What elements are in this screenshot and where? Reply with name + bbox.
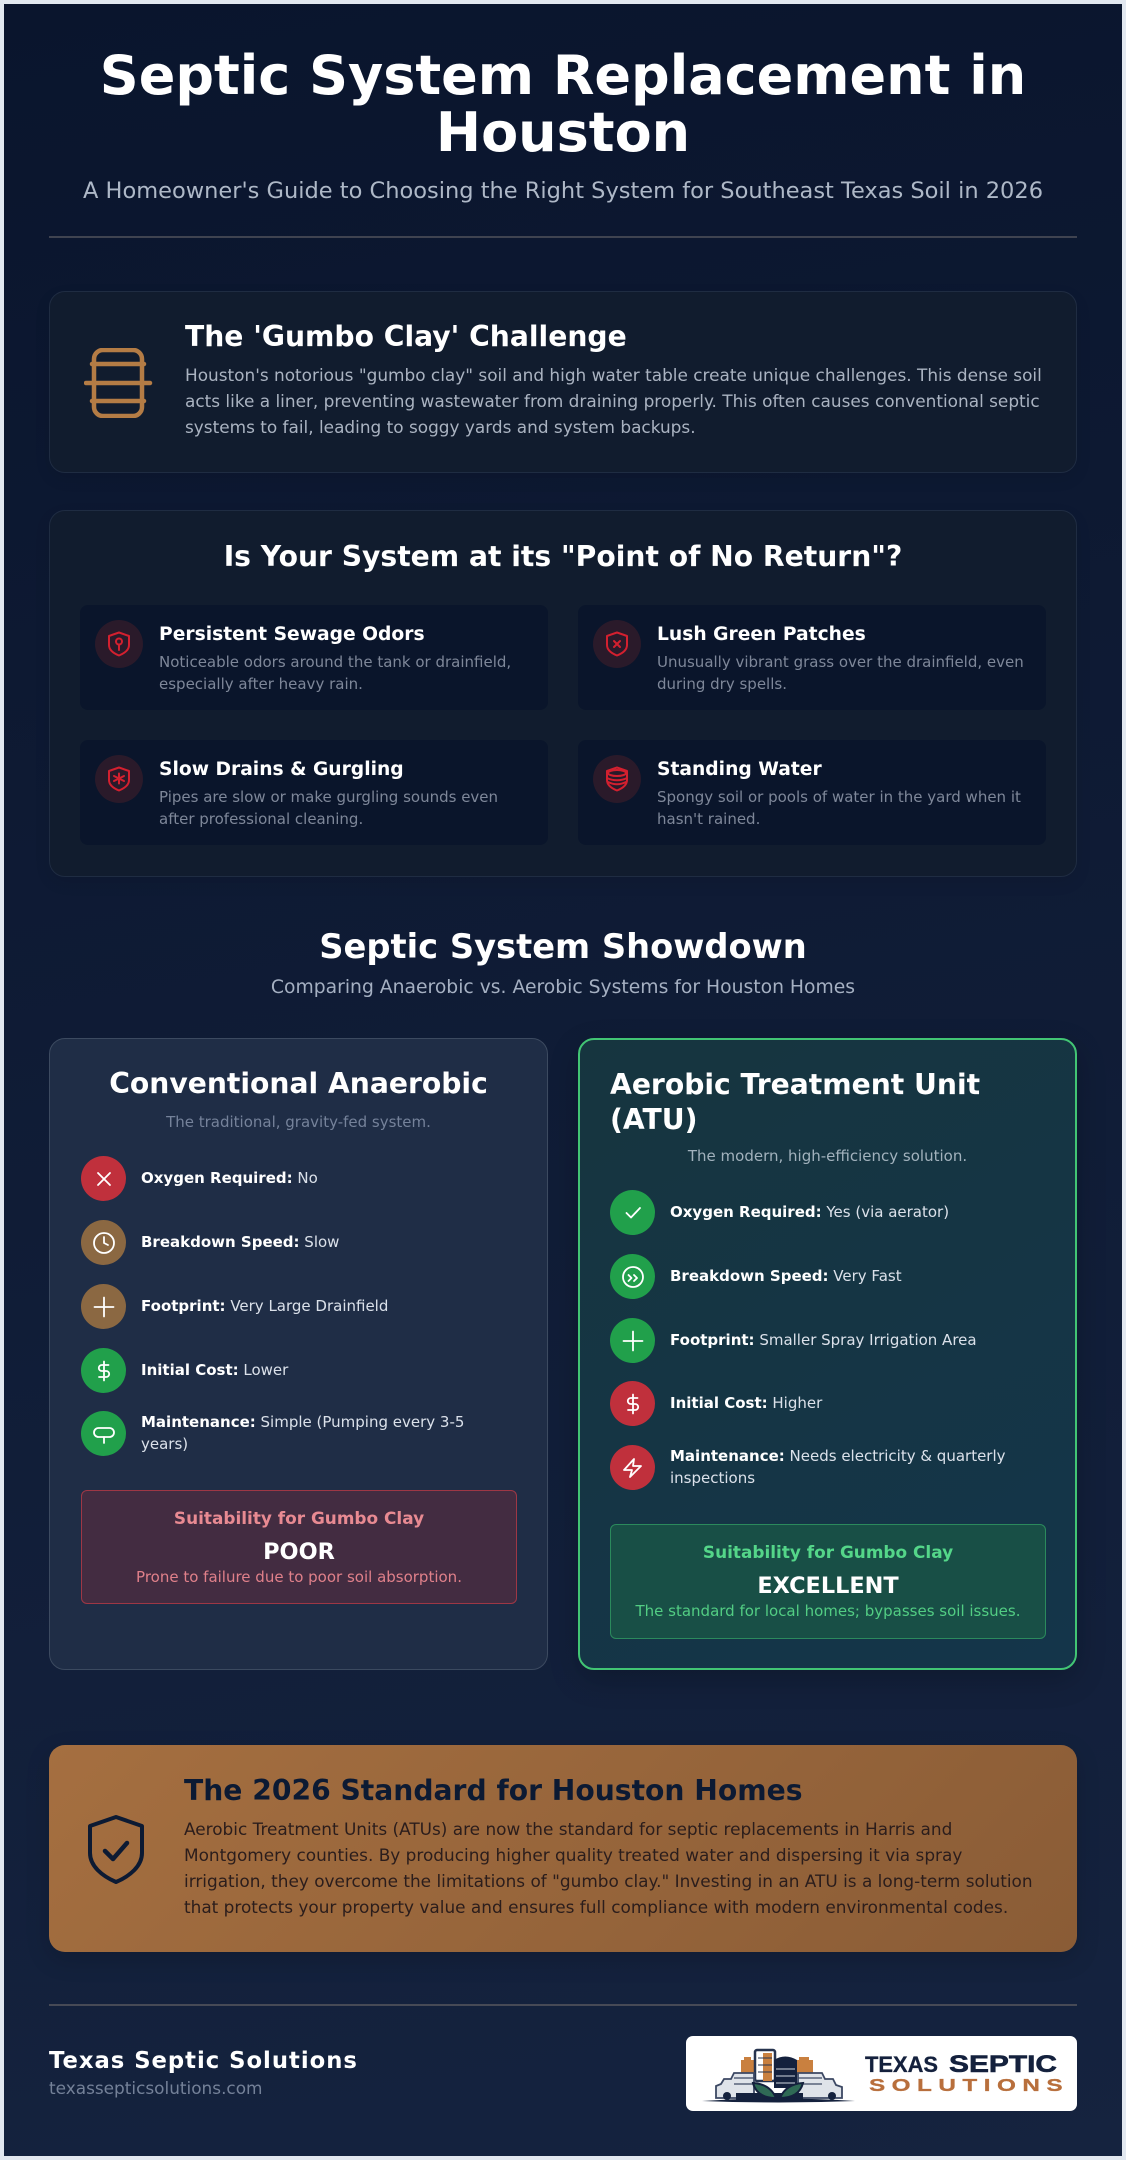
subtitle: A Homeowner's Guide to Choosing the Right System for Southeast Texas Soil in 2026	[83, 178, 1043, 204]
logo wordmark: SOLUTIONS	[869, 2075, 1069, 2095]
text: Breakdown Speed: Very Fast	[670, 1266, 902, 1284]
heading	[610, 1068, 980, 1136]
icon: shield check	[88, 1815, 144, 1884]
description	[657, 652, 1024, 693]
heading: Aerobic Treatment Unit	[610, 1068, 980, 1101]
text: Maintenance: Simple (Pumping every 3-5	[141, 1413, 464, 1431]
icon: clock	[81, 1220, 126, 1265]
sign: standing water	[578, 740, 1046, 845]
company name: Texas Septic Solutions	[49, 2048, 358, 2074]
row: oxygen	[81, 1156, 318, 1201]
title: Persistent Sewage Odors	[159, 624, 425, 644]
label: Suitability for Gumbo Clay	[174, 1508, 424, 1528]
title: Houston	[436, 101, 690, 164]
description: Unusually vibrant grass over the drainfield, even	[657, 652, 1024, 670]
icon: x	[81, 1156, 126, 1201]
text: Footprint: Smaller Spray Irrigation Area	[670, 1330, 977, 1348]
text block	[185, 365, 1042, 437]
text: Breakdown Speed: Slow	[141, 1232, 339, 1250]
icon: shield x	[593, 620, 641, 668]
icon: dollar	[610, 1381, 655, 1426]
panel: gumbo clay challenge	[49, 291, 1077, 473]
title: Lush Green Patches	[657, 624, 866, 644]
text: years)	[141, 1435, 188, 1453]
sign: slow drains	[80, 740, 548, 845]
section heading: showdown: Septic System Showdown	[319, 927, 807, 966]
logo	[686, 2036, 1077, 2111]
row: maintenance	[610, 1445, 1006, 1490]
description: during dry spells.	[657, 675, 787, 693]
panel: warning signs	[49, 510, 1077, 877]
sign: sewage odors	[80, 605, 548, 710]
note: Prone to failure due to poor soil absorption.	[136, 1568, 462, 1586]
heading: Is Your System at its "Point of No Return"?	[224, 540, 902, 573]
rating: EXCELLENT	[757, 1572, 899, 1598]
text block: Montgomery counties. By producing higher quality treated water and dispersing it via spray	[184, 1845, 962, 1865]
icon: shield keyhole	[95, 620, 143, 668]
icon: check	[610, 1190, 655, 1235]
row: oxygen	[610, 1190, 949, 1235]
text: Footprint: Very Large Drainfield	[141, 1296, 388, 1314]
description	[657, 788, 1021, 828]
icon: plus	[610, 1318, 655, 1363]
label: Suitability for Gumbo Clay	[703, 1542, 953, 1562]
description: The traditional, gravity-fed system.	[166, 1113, 431, 1131]
row: maintenance	[81, 1411, 464, 1456]
description: The modern, high-efficiency solution.	[688, 1147, 967, 1165]
icon: pump	[81, 1411, 126, 1456]
text: inspections	[670, 1469, 755, 1487]
suitability: excellent	[610, 1524, 1046, 1639]
heading: The 2026 Standard for Houston Homes	[184, 1774, 803, 1807]
text: Initial Cost: Lower	[141, 1360, 288, 1378]
website: texassepticsolutions.com	[49, 2078, 263, 2098]
row: footprint	[81, 1284, 388, 1329]
heading: Conventional Anaerobic	[109, 1067, 488, 1100]
section subheading: Comparing Anaerobic vs. Aerobic Systems for Houston Homes	[271, 976, 855, 998]
text block: Aerobic Treatment Units (ATUs) are now the standard for septic replacements in Harris and	[184, 1819, 952, 1839]
text	[141, 1413, 464, 1453]
panel: aerobic treatment unit	[578, 1038, 1077, 1670]
title	[100, 44, 1026, 164]
description	[159, 788, 498, 828]
text block: irrigation, they overcome the limitations of "gumbo clay." Investing in an ATU is a long-term solution	[184, 1871, 1033, 1891]
description	[159, 652, 511, 693]
icon: plus	[81, 1284, 126, 1329]
description: after professional cleaning.	[159, 810, 363, 828]
description: hasn't rained.	[657, 810, 760, 828]
banner: 2026 standard	[49, 1745, 1077, 1952]
icon: barrel	[84, 348, 152, 418]
logo wordmark: TEXAS	[865, 2052, 938, 2077]
text: Oxygen Required: No	[141, 1168, 318, 1186]
description: Spongy soil or pools of water in the yard when it	[657, 788, 1021, 806]
description: Noticeable odors around the tank or drainfield,	[159, 652, 511, 670]
icon: bolt	[610, 1445, 655, 1490]
text: Maintenance: Needs electricity & quarterly	[670, 1447, 1006, 1465]
heading: (ATU)	[610, 1103, 698, 1136]
text block: Houston's notorious "gumbo clay" soil and high water table create unique challenges. This dense soil	[185, 365, 1042, 385]
title: Slow Drains & Gurgling	[159, 758, 404, 780]
text block: that protects your property value and ensures full compliance with modern environmental codes.	[184, 1897, 1008, 1917]
row: cost	[81, 1348, 288, 1393]
text block: systems to fail, leading to soggy yards and system backups.	[185, 417, 696, 437]
rating: POOR	[263, 1538, 335, 1564]
logo art	[702, 2050, 855, 2102]
icon: fast forward	[610, 1254, 655, 1299]
icon: shield asterisk	[95, 755, 143, 803]
row: breakdown	[81, 1220, 339, 1265]
icon: dollar	[81, 1348, 126, 1393]
row: footprint	[610, 1318, 977, 1363]
description: especially after heavy rain.	[159, 675, 363, 693]
note: The standard for local homes; bypasses soil issues.	[635, 1602, 1020, 1620]
row: cost	[610, 1381, 822, 1426]
title: Standing Water	[657, 758, 822, 780]
title: Septic System Replacement in	[100, 44, 1026, 107]
footer brand	[49, 2048, 358, 2098]
logo wordmark: SEPTIC	[949, 2051, 1057, 2078]
logo wordmark	[865, 2051, 1069, 2095]
text block: acts like a liner, preventing wastewater from draining properly. This often causes conventional septic	[185, 391, 1040, 411]
description: Pipes are slow or make gurgling sounds even	[159, 788, 498, 806]
heading: The 'Gumbo Clay' Challenge	[185, 320, 627, 353]
suitability: poor	[81, 1490, 517, 1604]
text: Initial Cost: Higher	[670, 1394, 822, 1412]
row: breakdown	[610, 1254, 902, 1299]
icon: shield water	[593, 755, 641, 803]
panel: conventional anaerobic	[49, 1038, 548, 1670]
text block	[184, 1819, 1033, 1917]
sign: lush patches	[578, 605, 1046, 710]
text	[670, 1447, 1006, 1487]
text: Oxygen Required: Yes (via aerator)	[670, 1202, 949, 1220]
